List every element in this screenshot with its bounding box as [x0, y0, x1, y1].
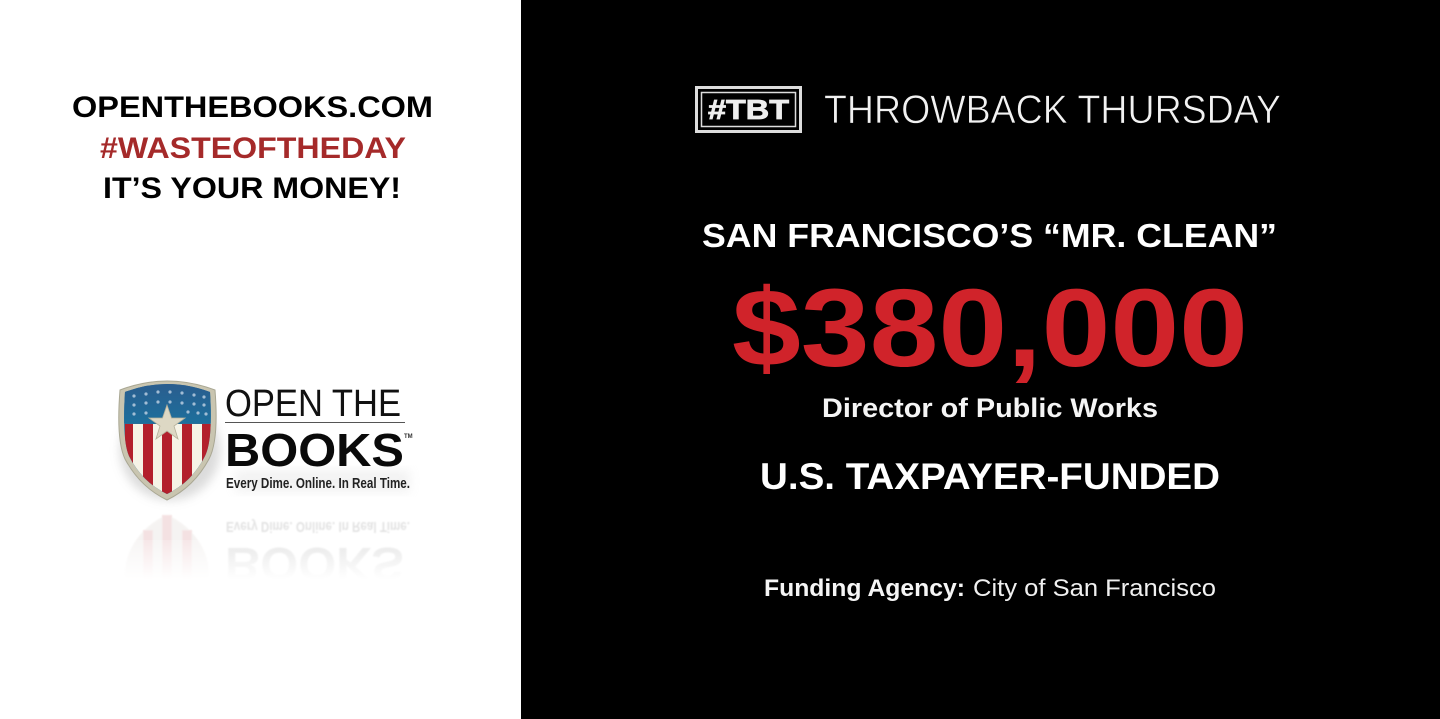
logo reflection: BOOKS — [225, 538, 404, 590]
icon: TBT stamp: #TBT — [708, 94, 789, 125]
header title: THROWBACK THURSDAY — [824, 88, 1281, 132]
icon: TBT stamp — [696, 88, 800, 132]
logo tagline: Every Dime. Online. In Real Time. — [226, 476, 410, 492]
subheading: San Francisco's Mr. Clean: SAN FRANCISCO’S “MR. CLEAN” — [702, 217, 1277, 254]
icon: flag shield — [119, 378, 216, 500]
funding agency: City of San Francisco — [973, 575, 1216, 602]
logo reflection — [125, 515, 410, 590]
funding agency — [764, 575, 1216, 602]
logo trademark: TM — [404, 434, 413, 440]
logo wordmark: BOOKS: BOOKS — [225, 424, 404, 476]
panel: left white background — [0, 0, 521, 719]
header: throwback Thursday — [696, 88, 1281, 132]
logo reflection: Every Dime. Online. In Real Time. — [226, 518, 410, 534]
heading: OpenTheBooks.com tagline: OPENTHEBOOKS.COM — [72, 91, 433, 124]
taxpayer funded label: U.S. TAXPAYER-FUNDED — [760, 456, 1220, 497]
job title: Director of Public Works — [822, 393, 1158, 423]
panel: right black background — [521, 0, 1440, 719]
heading: OpenTheBooks.com tagline: #WASTEOFTHEDAY — [100, 132, 406, 165]
big number: salary: $380,000 — [732, 267, 1248, 390]
funding agency: Funding Agency: — [764, 575, 965, 602]
heading: OpenTheBooks.com tagline: IT’S YOUR MONEY! — [103, 172, 401, 205]
logo: Open The Books — [116, 380, 412, 566]
heading: OpenTheBooks.com tagline — [72, 91, 433, 205]
logo wordmark: OPEN THE: OPEN THE — [225, 383, 401, 425]
